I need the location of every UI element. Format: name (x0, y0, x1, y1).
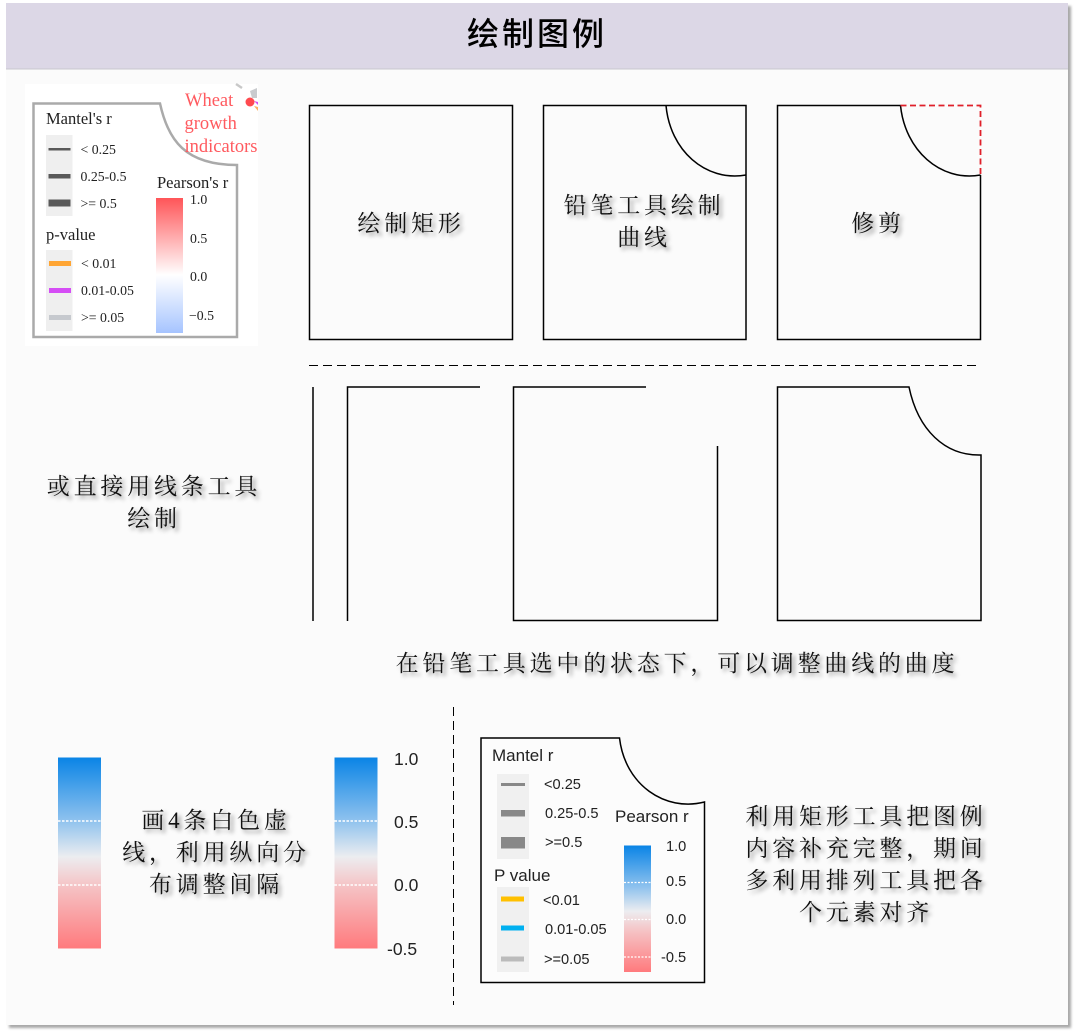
Mantel r legend: Mantel r (492, 746, 554, 765)
P value legend: <0.01 (543, 893, 580, 909)
colour bar with labels: -0.5 (387, 939, 417, 959)
step 3 trimmed rectangle (778, 106, 980, 340)
step 1 rectangle (310, 106, 512, 340)
Mantel's r legend: < 0.25 (80, 142, 116, 157)
colour bar with labels: 0.0 (394, 875, 419, 895)
p-value legend: 0.01-0.05 (81, 283, 134, 298)
p-value legend: >= 0.05 (81, 310, 124, 325)
caption: pencil curve (564, 193, 724, 252)
caption: adjust curvature: 在铅笔工具选中的状态下，可以调整曲线的曲度 (396, 651, 958, 676)
Pearson r colour bar: 0.0 (666, 912, 686, 928)
caption: line tool: 绘制 (127, 506, 181, 531)
dashed divider (309, 364, 981, 366)
Pearson r colour bar: 0.5 (666, 874, 686, 890)
caption: complete the legend: 多利用排列工具把各 (745, 868, 987, 893)
reference legend outline (34, 104, 237, 337)
Mantel r legend: 0.25-0.5 (545, 806, 599, 822)
P value legend: P value (494, 866, 550, 885)
line step: open outline (514, 387, 718, 620)
Pearson's r colour bar: 1.0 (190, 192, 207, 207)
Pearson r colour bar: 1.0 (666, 839, 686, 855)
caption: draw rectangle: 绘制矩形 (357, 211, 465, 236)
recreated legend panel (481, 738, 704, 982)
caption: trim: 修剪 (851, 211, 905, 236)
line step: first strokes (313, 387, 480, 621)
caption: complete the legend (745, 804, 987, 927)
wheat growth indicators label: Wheat (185, 91, 234, 111)
p-value legend: p-value (46, 225, 95, 244)
Pearson's r colour bar: 0.5 (190, 231, 207, 246)
colour bar with white dashes (58, 758, 101, 948)
caption: pencil curve: 铅笔工具绘制 (564, 193, 724, 218)
caption: white dashes: 线，利用纵向分 (122, 840, 310, 865)
P value legend: 0.01-0.05 (545, 922, 607, 938)
Mantel r legend: >=0.5 (545, 835, 582, 851)
Pearson's r colour bar (156, 173, 229, 333)
vertical dashed divider (452, 707, 454, 1005)
caption: white dashes: 画4条白色虚 (141, 808, 291, 833)
line step: finished outline (778, 387, 981, 620)
colour bar with labels: 1.0 (394, 749, 419, 769)
caption: line tool: 或直接用线条工具 (47, 474, 261, 499)
Pearson r colour bar (615, 807, 689, 972)
network fragment icon (236, 84, 258, 111)
colour bar with labels (334, 749, 419, 959)
wheat growth indicators label (184, 91, 257, 157)
Pearson's r colour bar: 0.0 (190, 269, 207, 284)
caption: complete the legend: 个元素对齐 (799, 900, 933, 925)
Mantel r legend (492, 746, 599, 859)
caption: line tool (47, 474, 261, 533)
Pearson r colour bar: -0.5 (661, 950, 686, 966)
caption: white dashes: 布调整间隔 (149, 872, 283, 897)
caption: white dashes (122, 808, 310, 899)
colour bar with labels: 0.5 (394, 812, 418, 832)
Mantel's r legend: Mantel's r (46, 109, 112, 128)
P value legend: >=0.05 (544, 952, 589, 968)
caption: complete the legend: 利用矩形工具把图例 (745, 804, 987, 829)
Mantel r legend: <0.25 (544, 777, 581, 793)
reference legend panel (25, 84, 258, 346)
step 2 rectangle with pencil curve (544, 106, 746, 340)
legend outline (481, 738, 704, 982)
caption: pencil curve: 曲线 (617, 225, 671, 250)
caption: complete the legend: 内容补充完整，期间 (745, 836, 987, 861)
wheat growth indicators label: indicators (184, 137, 257, 157)
p-value legend: < 0.01 (81, 256, 116, 271)
P value legend (494, 866, 607, 972)
Mantel's r legend (46, 109, 127, 216)
Pearson's r colour bar: −0.5 (189, 308, 214, 323)
wheat growth indicators label: growth (184, 114, 237, 134)
Mantel's r legend: >= 0.5 (80, 196, 117, 211)
title: 绘制图例 (467, 16, 607, 52)
Pearson r colour bar: Pearson r (615, 807, 689, 826)
p-value legend (46, 225, 134, 331)
Mantel's r legend: 0.25-0.5 (80, 169, 127, 184)
Pearson's r colour bar: Pearson's r (157, 173, 229, 192)
